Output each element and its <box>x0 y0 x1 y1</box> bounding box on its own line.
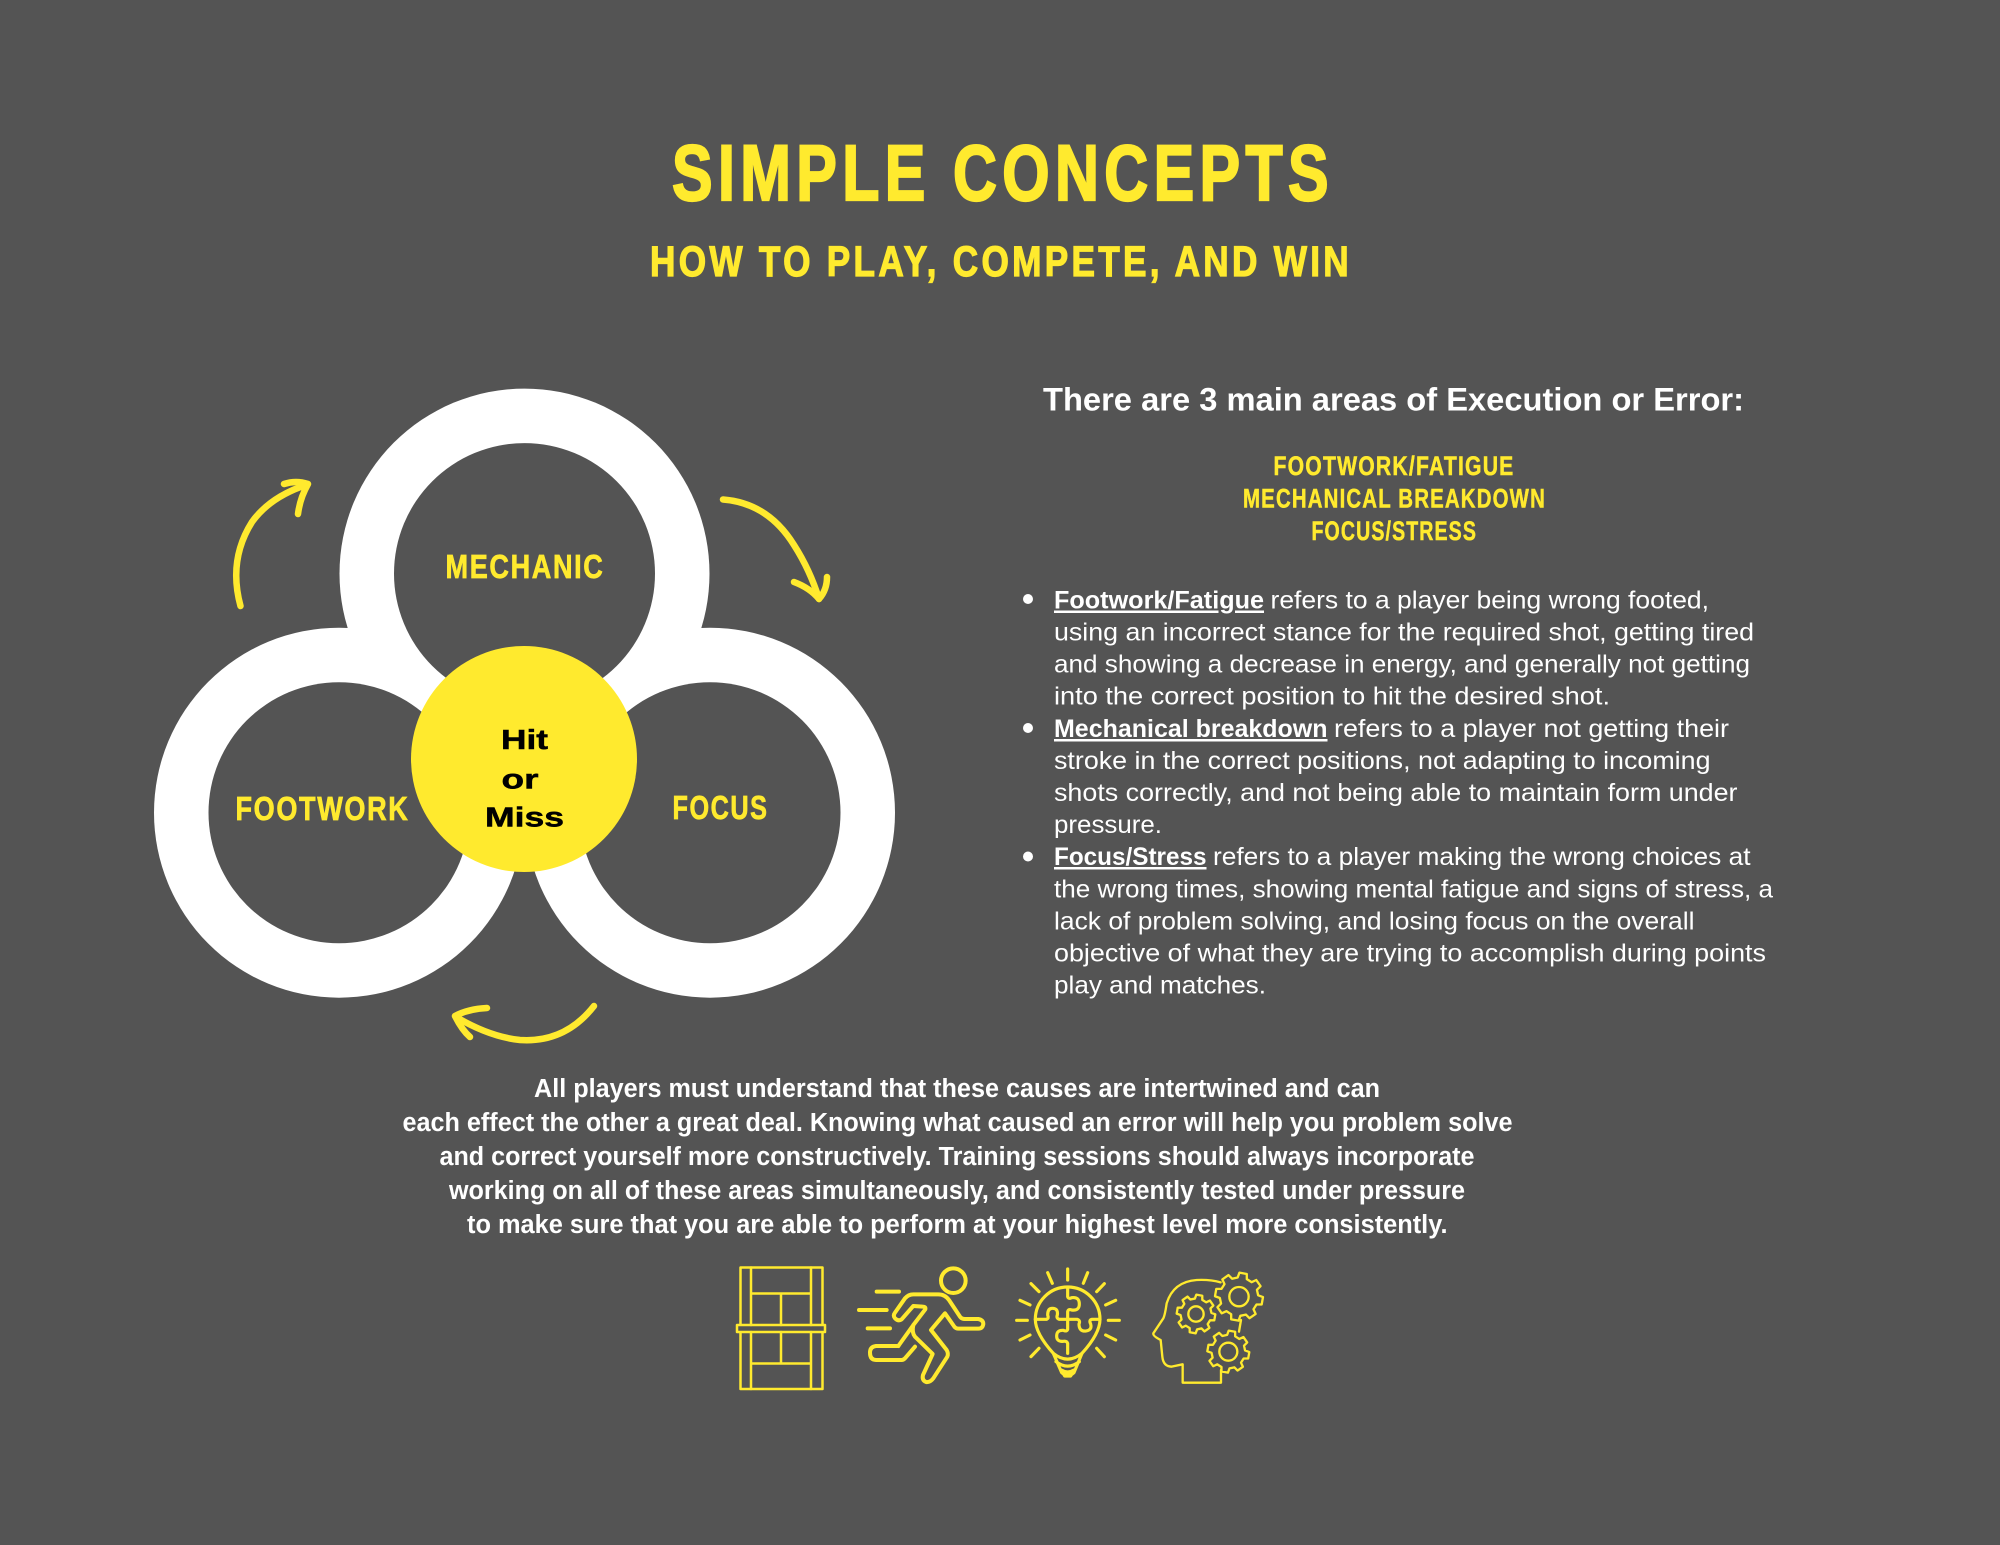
label: footwork: FOOTWORK <box>236 790 410 827</box>
line 2: using an incorrect stance for the required shot, getting tired <box>1054 618 1754 646</box>
term: Focus/Stress <box>1054 843 1206 871</box>
footwork hole <box>208 682 470 943</box>
line 5: play and matches. <box>1054 972 1266 1000</box>
bullet text: focus/stress <box>1023 843 1773 1000</box>
line 1: refers to a player not getting their <box>1334 715 1729 743</box>
label: or: or <box>502 764 539 794</box>
term: Footwork/Fatigue <box>1054 586 1264 614</box>
area: footwork/fatigue: FOOTWORK/FATIGUE <box>1274 451 1514 481</box>
line 4: working on all of these areas simultaneously, and consistently tested under pressure <box>448 1177 1465 1205</box>
line 1: refers to a player making the wrong choices at <box>1213 843 1751 871</box>
line 2: each effect the other a great deal. Knowing what caused an error will help you problem solve <box>402 1109 1512 1137</box>
line 3: and correct yourself more constructively. Training sessions should always incorporate <box>440 1143 1474 1171</box>
line 3: and showing a decrease in energy, and generally not getting <box>1054 650 1750 678</box>
label: miss: Miss <box>485 802 564 832</box>
line 4: into the correct position to hit the desired shot. <box>1054 682 1610 710</box>
ring: mechanic outer <box>340 389 710 759</box>
line 3: shots correctly, and not being able to maintain form under <box>1054 779 1738 807</box>
label: mechanic: MECHANIC <box>446 548 604 585</box>
icon: tennis court <box>737 1268 825 1389</box>
line 3: lack of problem solving, and losing focus on the overall <box>1054 908 1694 936</box>
center circle <box>411 646 637 872</box>
diagram: three interlocking rings <box>154 389 895 998</box>
list of three areas <box>1243 451 1546 546</box>
term: Mechanical breakdown <box>1054 715 1328 743</box>
area: focus/stress: FOCUS/STRESS <box>1312 516 1477 546</box>
title: SIMPLE CONCEPTS <box>672 128 1334 217</box>
icon: running figure <box>859 1268 983 1382</box>
line 4: pressure. <box>1054 811 1162 839</box>
arrow: right, pointing down <box>723 500 827 599</box>
heading: main areas: There are 3 main areas of Execution or Error: <box>1043 382 1744 418</box>
label: focus: FOCUS <box>672 789 768 826</box>
ring: footwork outer <box>154 628 524 998</box>
line 4: objective of what they are trying to accomplish during points <box>1054 940 1766 968</box>
mechanic hole <box>394 443 655 704</box>
icon: head with gears <box>1153 1269 1266 1383</box>
arrow: bottom, pointing left <box>455 1006 594 1040</box>
line 2: stroke in the correct positions, not adapting to incoming <box>1054 747 1710 775</box>
subtitle: HOW TO PLAY, COMPETE, AND WIN <box>650 238 1352 286</box>
icon: lightbulb with puzzle <box>1017 1269 1119 1376</box>
bullet <box>1023 594 1033 604</box>
bullet text: mechanical breakdown <box>1023 715 1738 839</box>
bullet <box>1023 723 1033 733</box>
arrow: left, pointing up <box>236 482 308 606</box>
ring: focus outer <box>525 628 895 998</box>
focus hole <box>580 682 840 943</box>
line 5: to make sure that you are able to perform at your highest level more consistently. <box>467 1211 1448 1239</box>
line 2: the wrong times, showing mental fatigue and signs of stress, a <box>1054 876 1773 904</box>
bullet <box>1023 852 1033 862</box>
closing paragraph <box>402 1075 1512 1239</box>
line 1: refers to a player being wrong footed, <box>1270 586 1709 614</box>
bullet text: footwork/fatigue <box>1023 586 1754 710</box>
line 1: All players must understand that these causes are intertwined and can <box>534 1075 1380 1103</box>
label: hit: Hit <box>501 724 548 755</box>
area: mechanical breakdown: MECHANICAL BREAKDOWN <box>1243 484 1546 514</box>
